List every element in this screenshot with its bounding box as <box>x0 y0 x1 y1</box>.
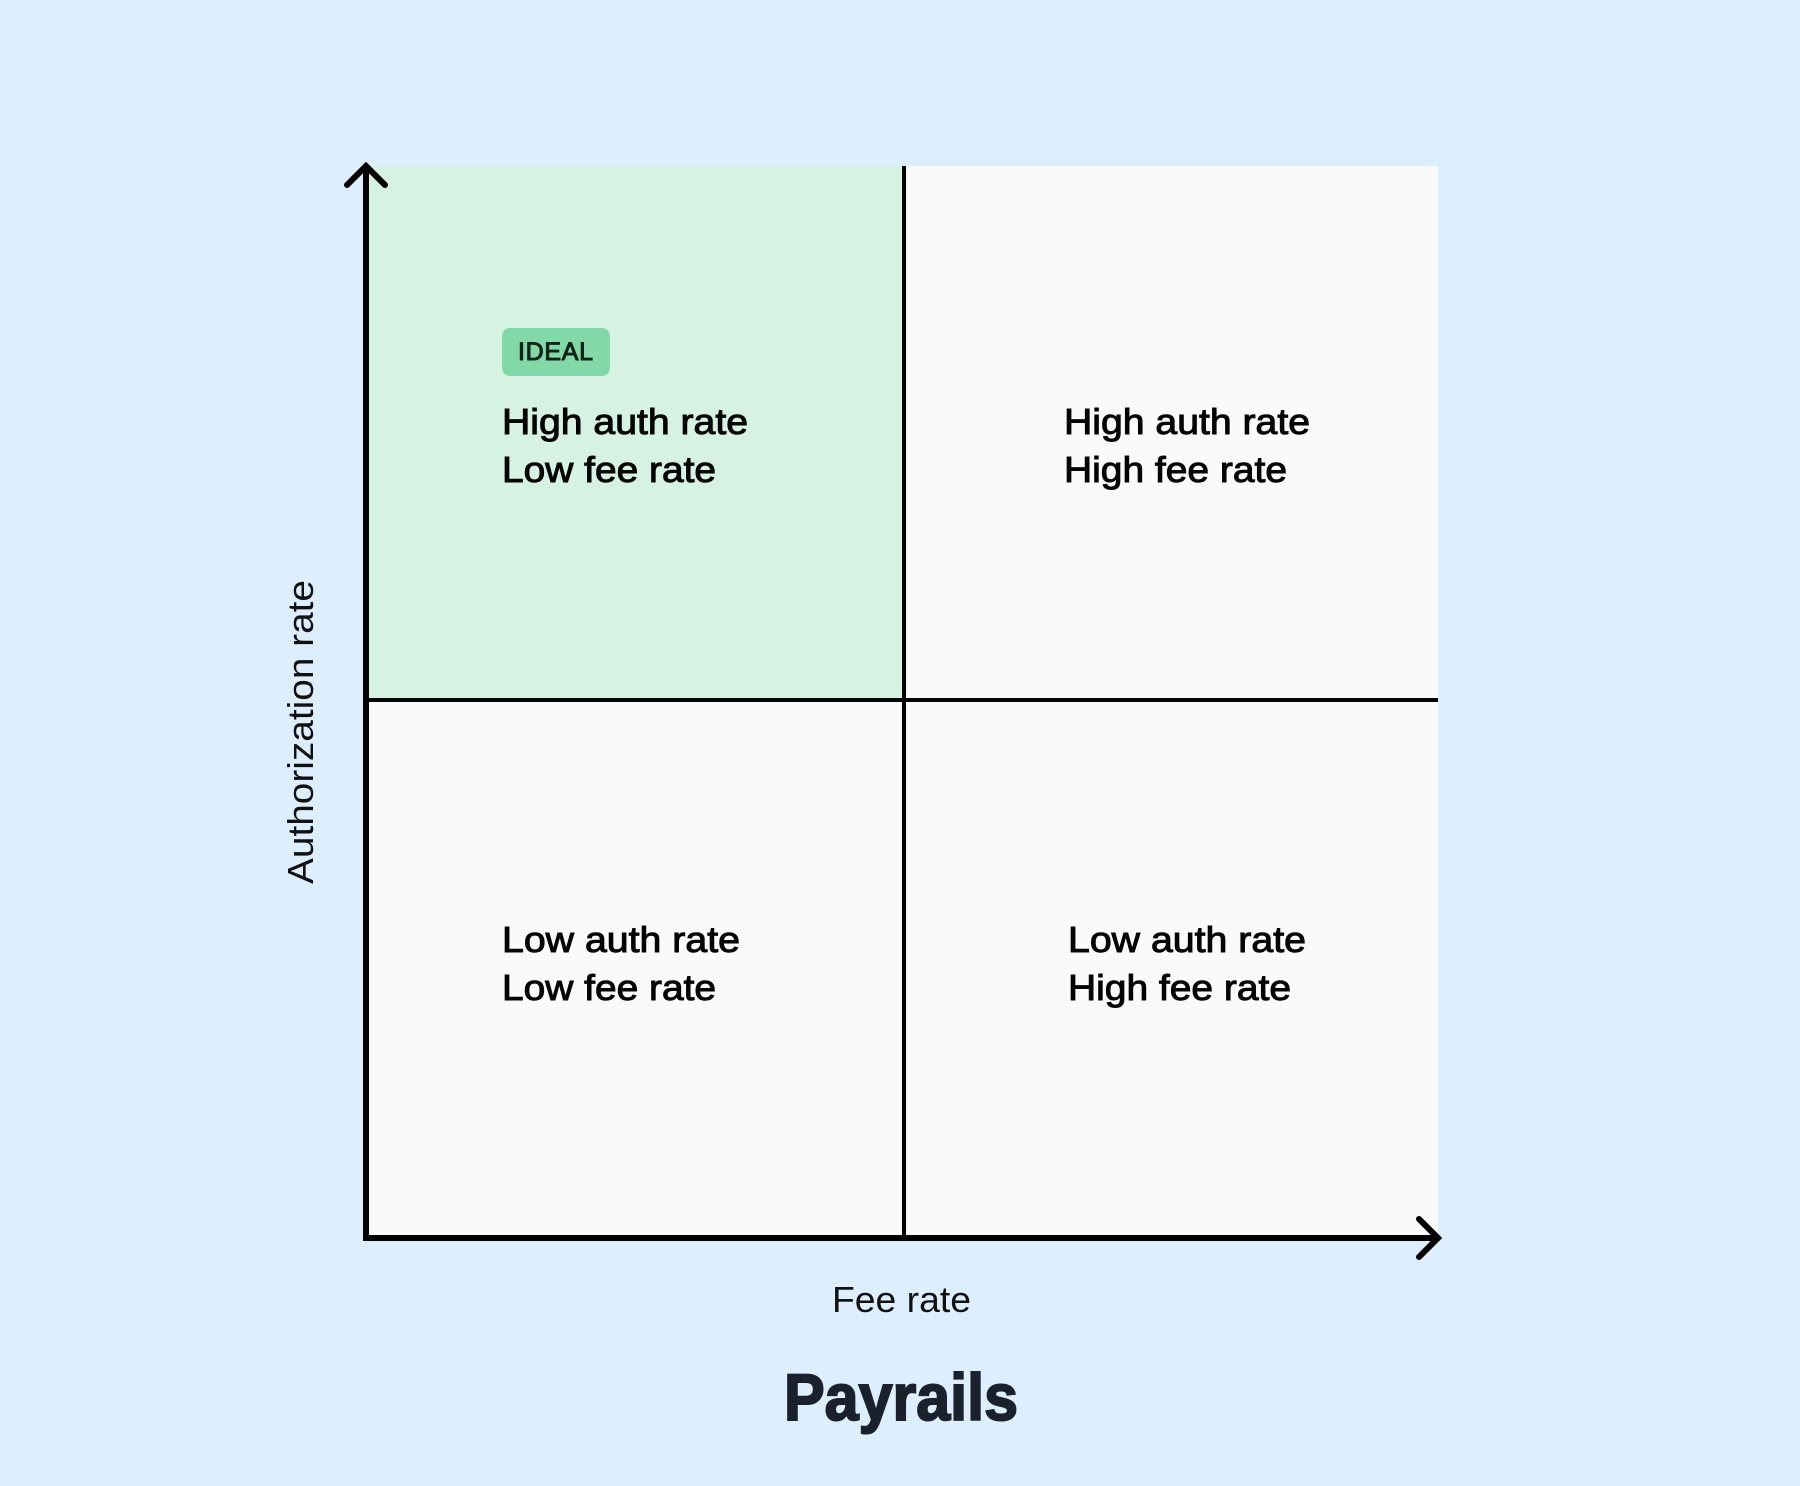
text: high auth high fee: High fee rate <box>1064 449 1287 490</box>
text: low auth high fee <box>1068 919 1306 1008</box>
text: low auth high fee: Low auth rate <box>1068 919 1306 960</box>
text: high auth low fee: High auth rate <box>502 401 748 442</box>
badge: ideal <box>502 328 610 376</box>
panel: high auth high fee <box>904 166 1438 699</box>
x axis label: Fee rate <box>832 1279 971 1320</box>
logo: Payrails: Payrails <box>784 1360 1018 1434</box>
text: high auth low fee: Low fee rate <box>502 449 716 490</box>
matrix chart <box>347 166 1438 1257</box>
text: high auth high fee <box>1064 401 1310 490</box>
text: high auth low fee <box>502 401 748 490</box>
text: high auth high fee: High auth rate <box>1064 401 1310 442</box>
badge: ideal: IDEAL <box>518 338 593 366</box>
arrow: vertical axis <box>347 166 385 1241</box>
panel: low auth low fee <box>366 699 904 1238</box>
arrow: horizontal axis <box>363 1219 1438 1257</box>
text: low auth high fee: High fee rate <box>1068 967 1291 1008</box>
text: low auth low fee <box>502 919 740 1008</box>
y axis label: Authorization rate <box>280 580 321 884</box>
text: low auth low fee: Low fee rate <box>502 967 716 1008</box>
text: low auth low fee: Low auth rate <box>502 919 740 960</box>
panel: high auth low fee (ideal) <box>366 166 904 699</box>
panel: low auth high fee <box>904 699 1438 1238</box>
